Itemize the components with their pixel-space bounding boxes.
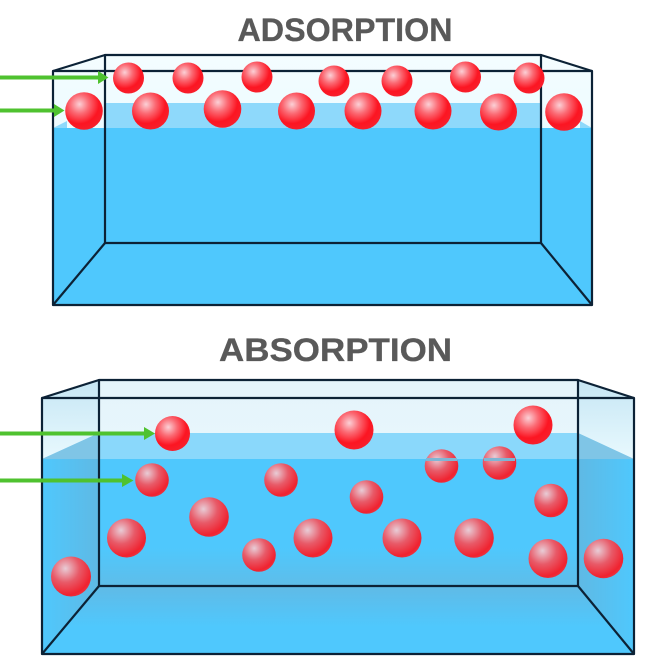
adsorbed back row of molecules [113, 62, 544, 96]
title: absorption: ABSORPTION [219, 332, 452, 368]
arrow: adsorption upper [0, 71, 108, 84]
title: adsorption: ADSORPTION [238, 12, 452, 48]
molecules absorbed in the liquid [51, 446, 623, 596]
panel: absorption tank [42, 380, 634, 654]
arrow: adsorption lower [0, 104, 64, 117]
panel: adsorption tank [53, 55, 592, 305]
adsorbed front row of molecules [65, 90, 583, 131]
arrow: absorption lower [0, 474, 134, 487]
arrow: absorption upper [0, 427, 155, 440]
molecules above the liquid [155, 406, 552, 451]
